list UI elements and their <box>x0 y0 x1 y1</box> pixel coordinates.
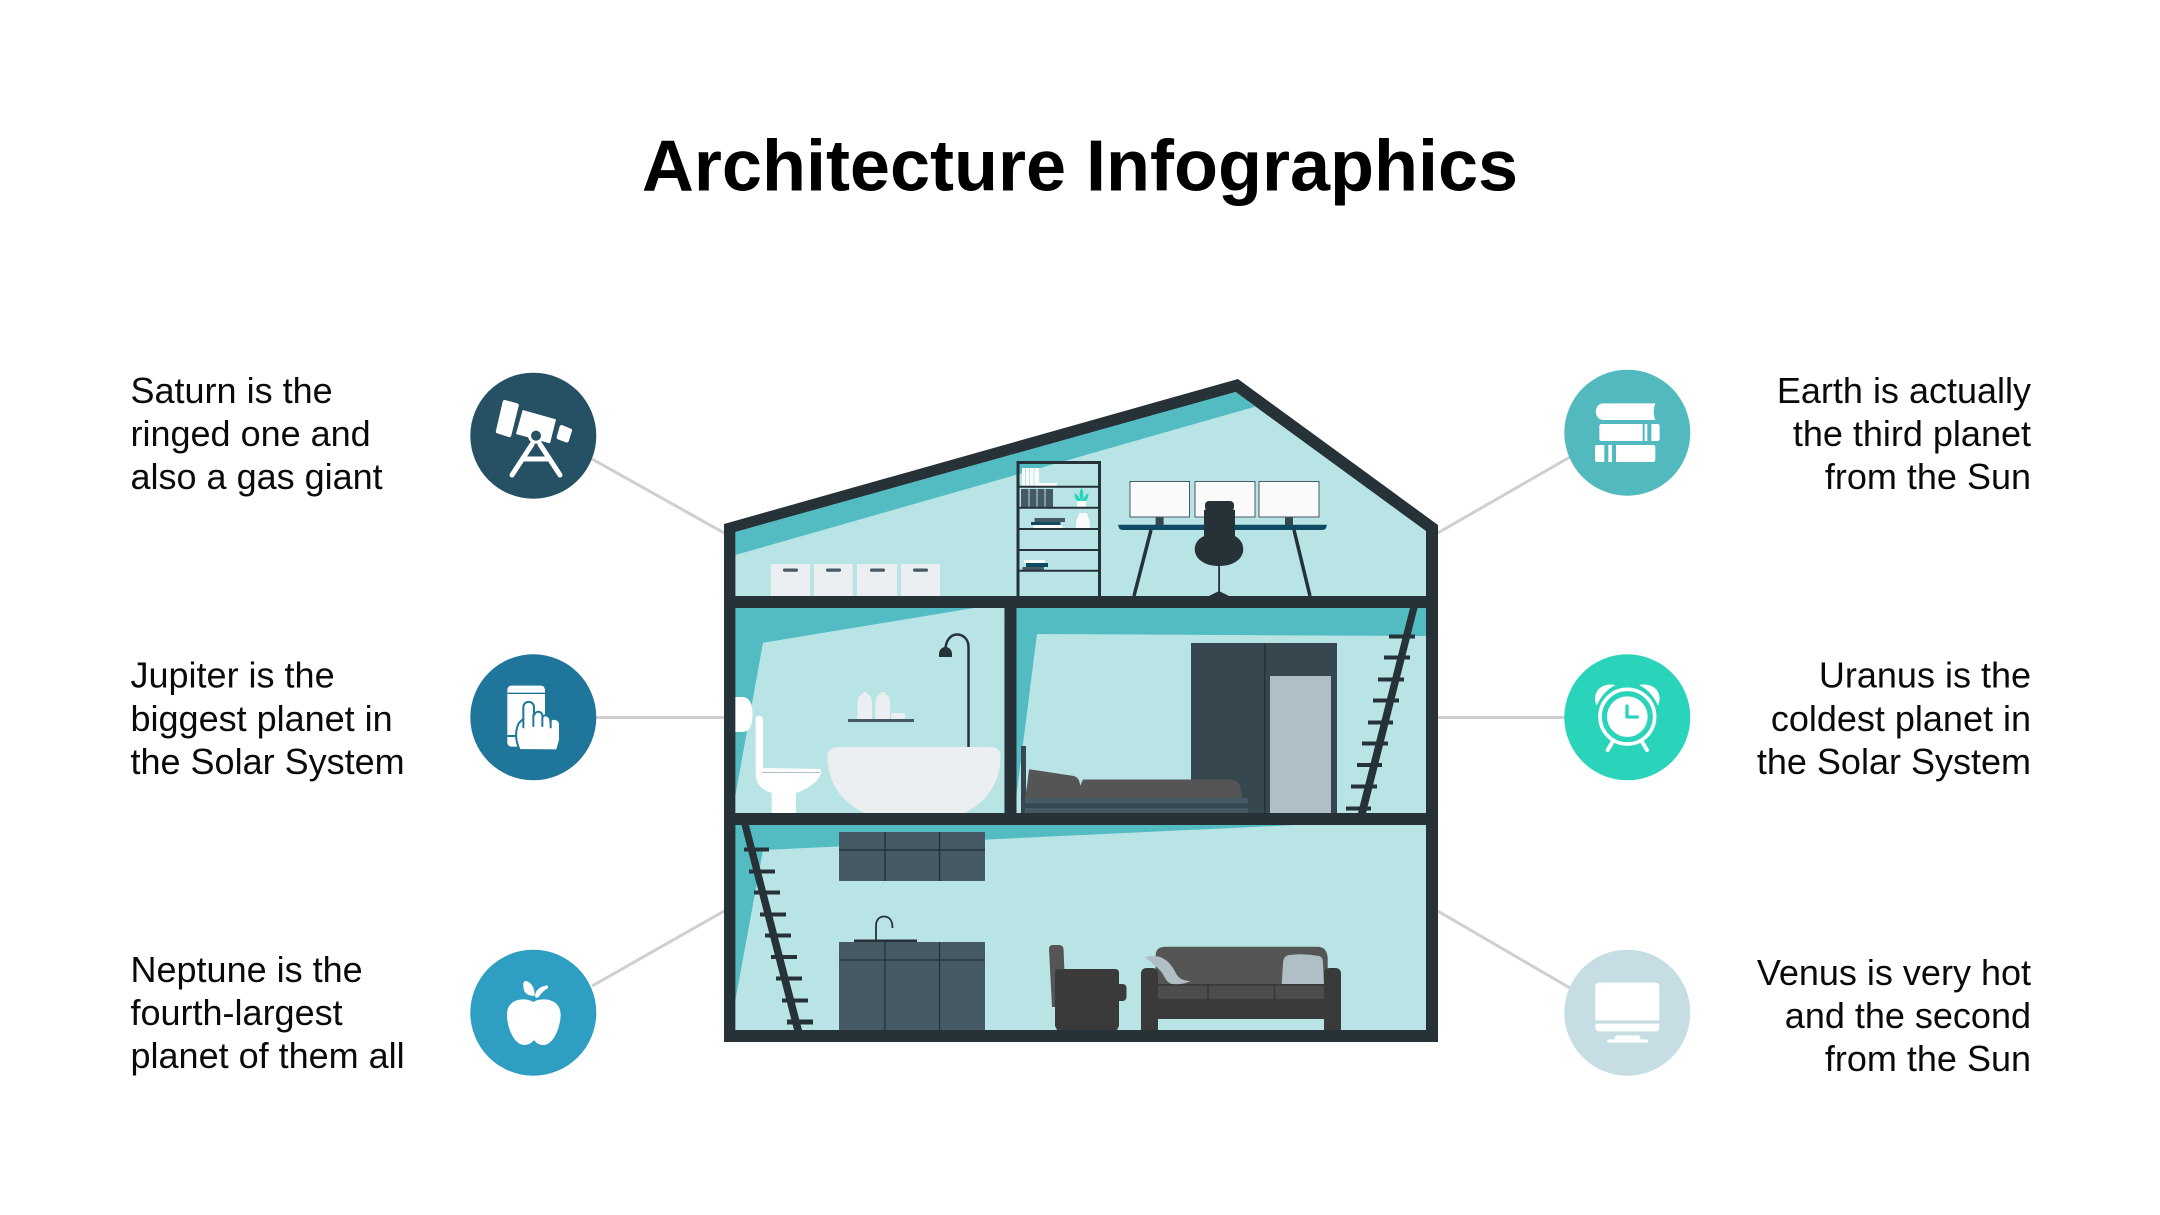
text: Saturn: ringed one and <box>130 413 371 454</box>
text: Neptune: planet of them all <box>130 1035 405 1076</box>
text: Saturn: Saturn is the <box>130 370 333 411</box>
text: Earth: the third planet <box>1793 413 2031 454</box>
sofa <box>1141 947 1341 1030</box>
text: Venus: and the second <box>1785 995 2031 1036</box>
house illustration <box>724 379 1438 1042</box>
bookshelf <box>1017 462 1100 596</box>
storage boxes <box>771 564 940 596</box>
text: Jupiter: biggest planet in <box>130 698 393 739</box>
bathroom <box>735 608 1004 813</box>
house frame <box>724 379 1438 1042</box>
toilet <box>756 716 821 813</box>
living room and kitchen <box>735 825 1426 1030</box>
text: Neptune: fourth-largest <box>130 992 343 1033</box>
text: Uranus: Uranus is the <box>1819 654 2031 696</box>
wall fixture <box>735 697 752 732</box>
icon: apple <box>507 981 561 1045</box>
circle: Saturn telescope icon <box>470 373 596 499</box>
text: Uranus: coldest planet in <box>1771 698 2031 739</box>
circle: Earth books icon <box>1564 370 1690 496</box>
ladder <box>742 825 813 1030</box>
bath shelf with bottles <box>848 692 914 722</box>
floor beams and wall <box>724 596 1438 825</box>
text: Venus: Venus is very hot <box>1757 952 2031 993</box>
icon: desktop monitor <box>1595 983 1659 1043</box>
text: Saturn: also a gas giant <box>130 456 383 497</box>
bathtub <box>828 747 1000 813</box>
text: Venus: from the Sun <box>1825 1038 2031 1079</box>
text: Earth: from the Sun <box>1825 456 2031 497</box>
circle: Jupiter phone icon <box>470 654 596 780</box>
armchair <box>1049 945 1126 1030</box>
circle: Neptune apple icon <box>470 950 596 1076</box>
desk with monitors <box>1118 482 1327 596</box>
icon: stacked books <box>1595 403 1660 462</box>
icon: hand on phone <box>507 686 560 750</box>
text: Neptune: Neptune is the <box>130 949 363 990</box>
connector lines <box>592 457 1570 988</box>
office chair <box>1195 501 1243 596</box>
text: Earth: Earth is actually <box>1777 370 2031 411</box>
text: Jupiter: the Solar System <box>130 741 405 782</box>
ladder <box>1346 608 1418 813</box>
bed <box>1021 746 1248 813</box>
icon: alarm clock <box>1595 685 1660 750</box>
text: Uranus: the Solar System <box>1757 741 2031 782</box>
text: Jupiter: Jupiter is the <box>130 654 335 696</box>
kitchen sink with faucet <box>839 916 985 1030</box>
circle: Venus monitor icon <box>1564 950 1690 1076</box>
circle: Uranus alarm clock icon <box>1564 654 1690 780</box>
title: Architecture Infographics <box>642 126 1518 206</box>
bedroom <box>1016 608 1426 813</box>
wardrobe <box>1191 643 1337 813</box>
shower <box>939 634 968 747</box>
icon: telescope <box>496 400 572 475</box>
attic room <box>735 392 1426 596</box>
upper kitchen cabinet <box>839 832 985 881</box>
